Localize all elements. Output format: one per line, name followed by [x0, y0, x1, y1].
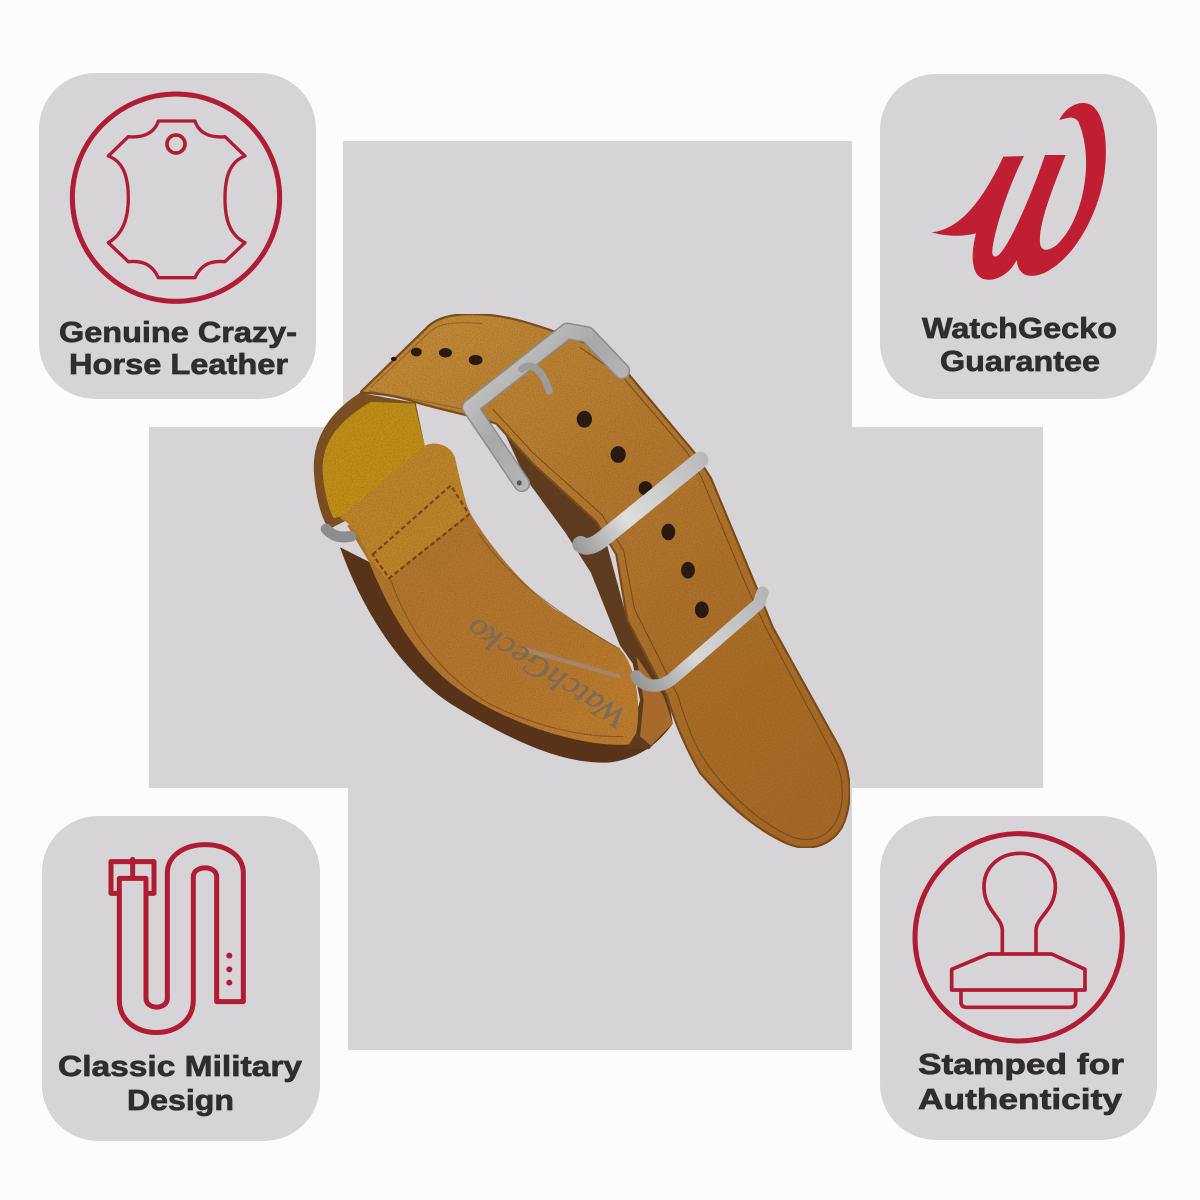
icon: rubber stamp in circle	[915, 834, 1122, 1041]
product photo: leather NATO strap	[314, 314, 850, 848]
icon: leather hide in circle	[72, 94, 280, 301]
card: genuine crazy-horse leather	[39, 73, 316, 399]
stitched leather flap	[340, 444, 469, 580]
label: watchgecko guarantee: WatchGecko	[922, 313, 1117, 345]
icon: folded belt	[111, 845, 243, 1032]
label: watchgecko guarantee	[922, 313, 1117, 378]
suede lining	[314, 393, 425, 529]
label: stamped for authenticity: Stamped for	[918, 1049, 1124, 1081]
card: classic military design	[42, 816, 320, 1141]
label: genuine crazy-horse leather: Genuine Crazy-	[59, 317, 297, 349]
label: watchgecko guarantee: Guarantee	[940, 346, 1100, 378]
dark under-layer along the outer edge	[340, 547, 673, 763]
dark strap layer behind the front strap	[504, 431, 673, 749]
brown side strip beside the front strap	[636, 656, 673, 745]
label: classic military design: Classic Military	[58, 1051, 302, 1083]
label: stamped for authenticity: Authenticity	[918, 1084, 1122, 1116]
label: classic military design	[58, 1051, 302, 1117]
steel keeper loops	[326, 460, 763, 686]
central grey cross backdrop	[149, 141, 1043, 1050]
strap holes	[391, 348, 709, 618]
engraved logo wordmark: WatchGecko	[460, 610, 633, 736]
label: stamped for authenticity	[918, 1049, 1124, 1116]
steel buckle	[470, 331, 622, 485]
top strap layer	[360, 314, 850, 848]
card: watchgecko guarantee	[880, 74, 1157, 399]
engraved logo swash	[522, 647, 620, 679]
card: stamped for authenticity	[880, 816, 1157, 1140]
icon: script W logo	[932, 103, 1106, 280]
inner strap band	[347, 482, 638, 745]
label: genuine crazy-horse leather	[59, 317, 297, 381]
label: classic military design: Design	[127, 1085, 234, 1117]
label: genuine crazy-horse leather: Horse Leather	[69, 349, 288, 381]
